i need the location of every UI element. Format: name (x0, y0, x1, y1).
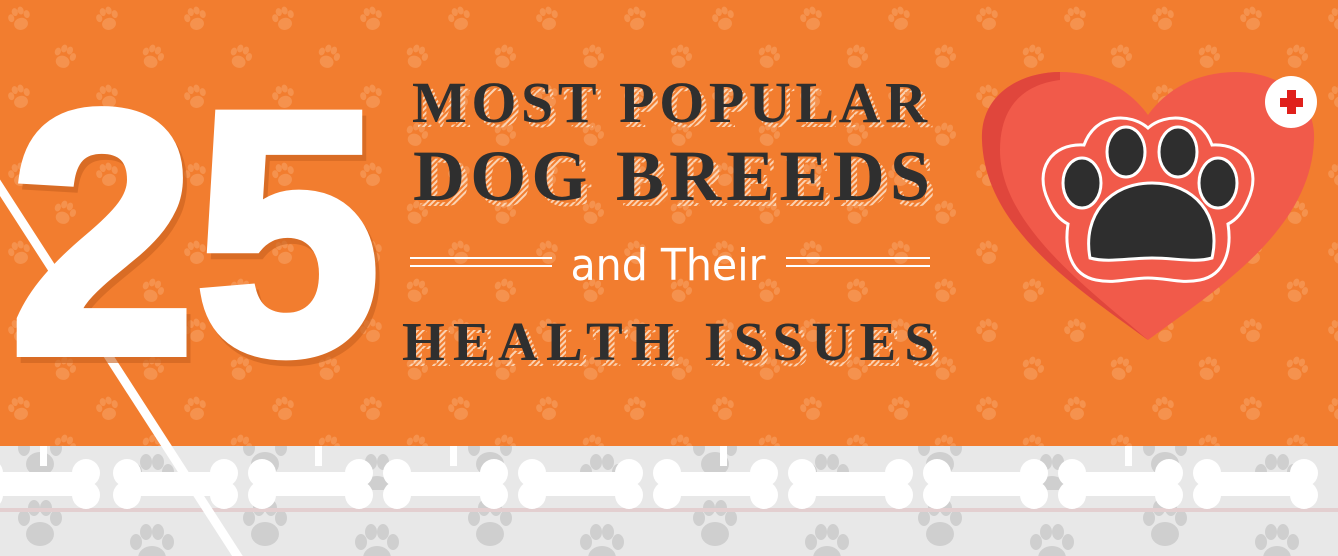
title line 2: DOG BREEDS (419, 142, 941, 222)
subtitle and their: and Their (570, 240, 766, 291)
grey bone strip (0, 446, 1338, 556)
title line 3: HEALTH ISSUES (408, 317, 948, 378)
title line 3: HEALTH ISSUES (402, 311, 942, 372)
big number 25: 25 (14, 47, 384, 432)
icon: heart with paw (982, 72, 1314, 340)
title line 1: MOST POPULAR (412, 70, 932, 135)
paw print (1043, 118, 1253, 281)
title (402, 70, 948, 378)
title line 1: MOST POPULAR (417, 75, 937, 140)
diagonal white line (0, 180, 240, 556)
icon: medical plus badge (1265, 76, 1317, 128)
big number 25: 25 (10, 41, 380, 426)
title line 2: DOG BREEDS (413, 136, 935, 216)
